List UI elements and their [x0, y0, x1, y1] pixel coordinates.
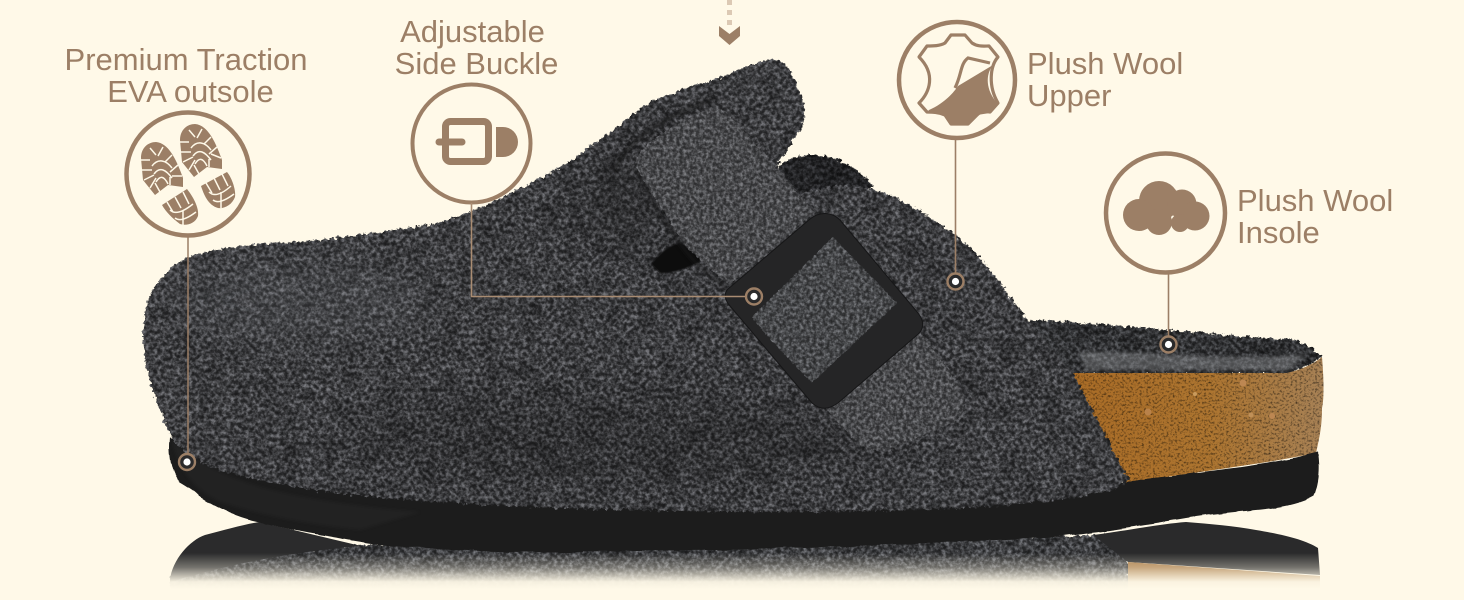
leader line: upper: [954, 139, 956, 274]
callout: buckle: [395, 14, 762, 304]
heading: insole: Insole: [1237, 215, 1320, 250]
icon: boot prints: [126, 112, 250, 236]
marker: outsole: [179, 454, 195, 470]
felt upper: [143, 60, 1130, 512]
leader line: outsole: [187, 236, 189, 455]
leader line: buckle: [472, 203, 746, 296]
leader line: insole: [1168, 273, 1170, 337]
buckle: [725, 213, 923, 408]
heading: buckle: Side Buckle: [395, 46, 558, 81]
heading: upper: Upper: [1027, 78, 1111, 113]
icon: cloud: [1106, 154, 1225, 272]
marker: insole: [1160, 336, 1176, 352]
heading: insole: Plush Wool: [1237, 183, 1393, 218]
reflection fade: [120, 553, 1360, 600]
outsole: [169, 438, 1319, 552]
reflected felt: [170, 535, 1130, 590]
buckle inner strap: [752, 237, 897, 383]
callout: upper: [899, 22, 1183, 290]
collar back: [779, 155, 873, 225]
reflected outsole, toe: [170, 522, 361, 582]
marker: buckle: [746, 288, 762, 304]
heading: outsole: EVA outsole: [107, 74, 274, 109]
reflected outsole, heel: [1093, 522, 1320, 575]
toe outsole highlight: [172, 440, 420, 530]
tonal shading on the felt: [170, 100, 900, 480]
reflection of the clog: [170, 522, 1320, 590]
lower strap: [825, 330, 964, 451]
insole: [1020, 320, 1322, 374]
callout: outsole: [65, 42, 307, 470]
callout: insole: [1106, 154, 1393, 352]
marker: upper: [948, 274, 964, 290]
upper strap: [635, 109, 814, 285]
heading: outsole: Premium Traction: [65, 42, 307, 77]
strap shadow: [636, 168, 728, 290]
vent hole: [651, 243, 703, 273]
icon: leather hide: [899, 22, 1015, 138]
reflected cork: [1128, 562, 1320, 590]
icon: belt buckle: [412, 84, 530, 202]
heading: upper: Plush Wool: [1027, 46, 1183, 81]
heading: buckle: Adjustable: [400, 14, 545, 49]
cork midsole: [1040, 357, 1324, 484]
arrow: from above: [719, 0, 740, 45]
clog illustration: [143, 60, 1324, 552]
